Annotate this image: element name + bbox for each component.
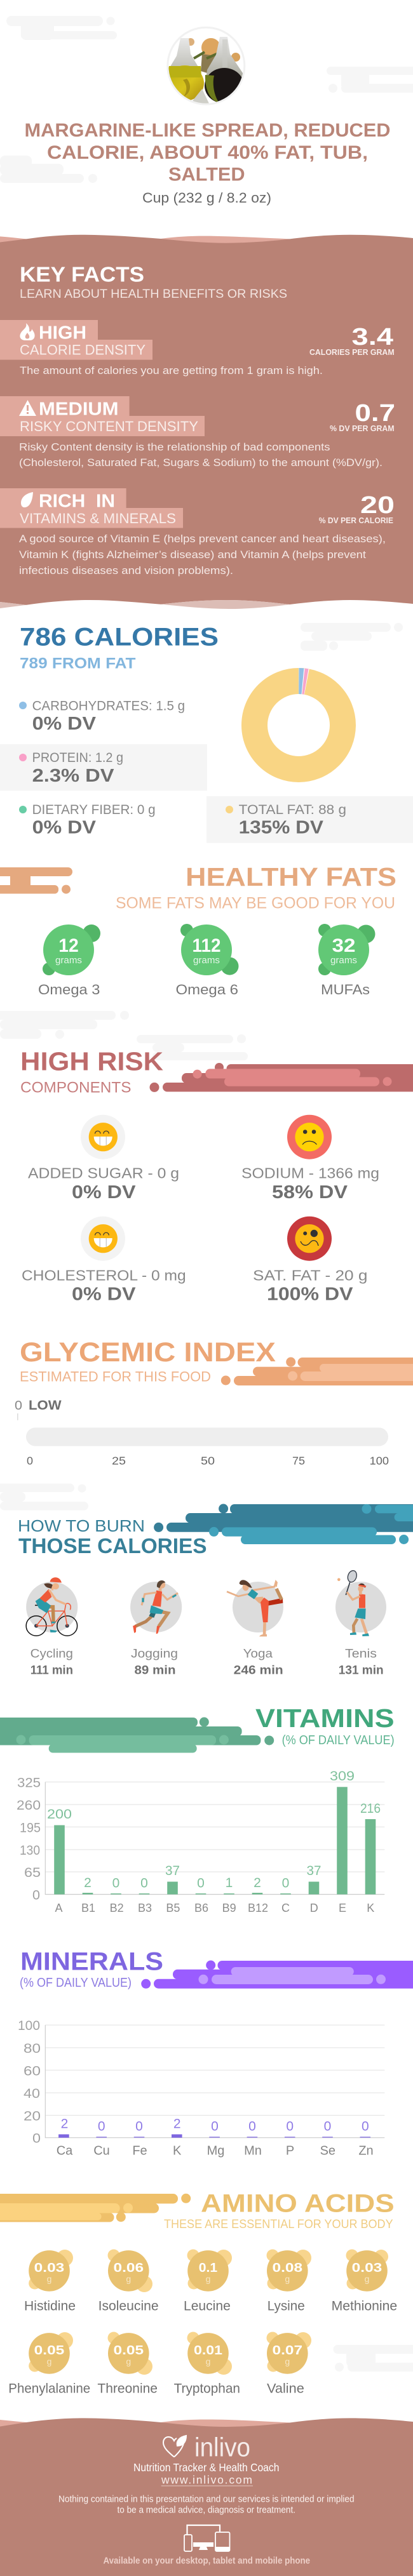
bar chart: minerals: 40 (24, 2086, 40, 2101)
bar chart: minerals: 2 (173, 2116, 181, 2131)
bar chart: minerals: 0 (324, 2119, 331, 2134)
bar chart: minerals: 0 (211, 2119, 219, 2134)
fact: calorie density: CALORIES PER GRAM (309, 347, 395, 357)
disclaimer: to be a medical advice, diagnosis or treatment. (117, 2504, 295, 2516)
bar chart: minerals: K (173, 2144, 182, 2158)
bar chart: minerals: 0 (98, 2119, 105, 2134)
fat: omega 6: 112 (192, 935, 221, 956)
bar chart: vitamins: B1 (81, 1902, 95, 1914)
macro: total fat: 135% DV (239, 818, 324, 838)
fat: omega 3: grams (55, 955, 82, 966)
amino: histidine: g (47, 2274, 51, 2284)
activity: jogging: 89 min (135, 1664, 175, 1678)
activity: yoga: Yoga (243, 1647, 273, 1661)
icon: queasy face (295, 1224, 324, 1253)
fact: rich in vitamins and minerals: 20 (360, 492, 395, 519)
bar chart: vitamins: 200 (47, 1807, 72, 1822)
background cloud: burn (0, 1483, 88, 1510)
fat: omega 6: grams (193, 955, 220, 966)
subheading: glycemic index: ESTIMATED FOR THIS FOOD (20, 1369, 211, 1384)
donut chart: macronutrients (254, 668, 343, 770)
risk: sodium: SODIUM - 1366 mg (241, 1165, 379, 1181)
bar chart: vitamins: 309 (330, 1769, 355, 1784)
tagline: Nutrition Tracker & Health Coach (133, 2461, 280, 2474)
subheading: healthy fats: SOME FATS MAY BE GOOD FOR YOU (116, 894, 395, 912)
background cloud: amino acids (333, 2345, 413, 2372)
amino: phenylalanine: Phenylalanine (8, 2382, 90, 2396)
logo: inlivo: inlivo (194, 2432, 250, 2462)
amino: valine: 0.07 (272, 2344, 302, 2358)
amino: histidine (24, 2250, 76, 2314)
risk: saturated fat: 100% DV (267, 1285, 353, 1305)
heading: healthy fats: HEALTHY FATS (186, 862, 396, 891)
glycemic index gauge: 100 (370, 1454, 389, 1467)
bar chart: vitamins: C (281, 1902, 290, 1914)
background clouds: high risk (0, 1011, 248, 1060)
fact: risky content density: 0.7 (355, 400, 395, 427)
heading: vitamins: VITAMINS (255, 1704, 395, 1733)
amino: isoleucine: 0.06 (113, 2261, 144, 2275)
amino: lysine (267, 2249, 311, 2314)
bar chart: minerals: Ca (57, 2144, 73, 2158)
risk: cholesterol: 0% DV (72, 1285, 136, 1305)
graphic: vitamins brush (0, 1717, 274, 1752)
bar chart: minerals: 60 (24, 2064, 41, 2078)
subheading: key facts: LEARN ABOUT HEALTH BENEFITS OR RISKS (20, 287, 287, 301)
activity: yoga: 246 min (234, 1664, 283, 1678)
title: SALTED (168, 164, 245, 185)
glycemic index gauge: 50 (201, 1454, 215, 1467)
activity: tennis (335, 1570, 386, 1678)
amino: phenylalanine: 0.05 (34, 2344, 64, 2358)
bar chart: vitamins: 0 (197, 1876, 205, 1891)
icon: heart and leaf (163, 2436, 186, 2457)
amino: lysine: 0.08 (272, 2261, 302, 2275)
bar chart: minerals: Mg (207, 2144, 224, 2158)
activity: tennis: Tenis (345, 1647, 377, 1661)
icon: flame (20, 323, 35, 340)
amino: phenylalanine (8, 2332, 90, 2396)
bar chart: minerals: Cu (93, 2144, 110, 2158)
bar chart: vitamins: 2 (84, 1876, 91, 1890)
amino: leucine: g (206, 2274, 210, 2284)
bar chart: vitamins: 37 (165, 1864, 180, 1878)
food photo: oil bottles (166, 27, 245, 105)
bar chart: vitamins: E (339, 1902, 346, 1914)
risk: cholesterol (22, 1217, 186, 1305)
heading: high risk: HIGH RISK (20, 1046, 163, 1076)
bar chart: vitamins: 0 (282, 1876, 289, 1891)
fat: MUFAs: grams (330, 955, 357, 966)
activity: jogging: Jogging (131, 1647, 178, 1661)
amino: tryptophan (174, 2332, 240, 2396)
macro: dietary fiber: DIETARY FIBER: 0 g (32, 803, 156, 817)
fact: calorie density (0, 320, 395, 377)
fact: rich in vitamins and minerals: A good source of Vitamin E (helps prevent cancer and heart diseases), (19, 533, 386, 545)
bar chart: vitamins: B5 (166, 1902, 180, 1914)
glycemic index gauge: 25 (112, 1454, 126, 1467)
bar chart: vitamins: 0 (112, 1876, 119, 1891)
fat: MUFAs: MUFAs (321, 982, 370, 998)
bar chart: vitamins: 325 (17, 1775, 41, 1790)
risk: cholesterol: CHOLESTEROL - 0 mg (22, 1267, 186, 1283)
fact: rich in vitamins and minerals: infectious diseases and vision problems). (19, 565, 233, 577)
bar chart: minerals: 0 (248, 2119, 256, 2134)
bar chart: minerals: Zn (358, 2144, 374, 2158)
bar chart: vitamins: 130 (20, 1843, 40, 1858)
activity: cycling: Cycling (30, 1647, 73, 1661)
icon: sad face (295, 1123, 324, 1151)
disclaimer (58, 2494, 355, 2516)
fact: calorie density: 3.4 (352, 324, 393, 350)
fat: omega 3: Omega 3 (38, 982, 100, 998)
amino: phenylalanine: g (47, 2356, 51, 2366)
fact: rich in vitamins and minerals: Vitamin K (fights Alzheimer’s disease) and Vitamin A (helps prevent (19, 549, 366, 561)
bar chart: minerals: 80 (24, 2041, 41, 2056)
subheading: vitamins: (% OF DAILY VALUE) (282, 1733, 395, 1747)
risk: sodium (241, 1115, 379, 1203)
activity: tennis: 131 min (339, 1664, 384, 1678)
fact: risky content density: MEDIUM (39, 399, 119, 420)
macro: dietary fiber: 0% DV (32, 818, 97, 838)
graphic: amino acids brush (0, 2194, 191, 2222)
glycemic index gauge: LOW (29, 1398, 62, 1413)
heading: glycemic index: GLYCEMIC INDEX (20, 1337, 276, 1368)
icon: leaf (21, 492, 33, 507)
heading: key facts: KEY FACTS (20, 264, 144, 287)
risk: added sugar: ADDED SUGAR - 0 g (28, 1165, 179, 1181)
fact: risky content density: Risky Content density is the relationship of bad components (19, 441, 330, 453)
fact: rich in vitamins and minerals: RICH IN (39, 491, 115, 512)
amino: methionine: g (365, 2274, 369, 2284)
macro: carbohydrates: 0% DV (32, 714, 97, 734)
macro: protein (0, 744, 207, 791)
fat: omega 3: 12 (58, 935, 79, 956)
bar chart: vitamins: 0 (32, 1888, 40, 1902)
background cloud: calories (301, 623, 403, 651)
bar chart: vitamins: D (310, 1902, 318, 1914)
activity: yoga (227, 1580, 283, 1678)
title (24, 120, 390, 185)
bar chart: vitamins: B6 (194, 1902, 208, 1914)
fact: risky content density: RISKY CONTENT DENSITY (20, 418, 198, 434)
heading: how to burn: HOW TO BURN (18, 1516, 145, 1535)
disclaimer: Nothing contained in this presentation and our services is intended or implied (58, 2494, 355, 2504)
risk: added sugar (28, 1115, 179, 1203)
fact: risky content density: (Cholesterol, Saturated Fat, Sugars & Sodium) to the amount (%DV/gr). (19, 457, 383, 469)
bar chart: minerals (18, 2019, 384, 2158)
background clouds: header (0, 16, 413, 183)
icon: warning triangle (19, 400, 36, 416)
bar chart: vitamins: 1 (226, 1876, 233, 1890)
bar chart: vitamins: B3 (138, 1902, 152, 1914)
amino: leucine: 0.1 (199, 2261, 217, 2275)
subheading: amino acids: THESE ARE ESSENTIAL FOR YOUR BODY (164, 2218, 393, 2231)
fact: risky content density: % DV PER GRAM (330, 424, 395, 433)
bar chart: vitamins: 2 (254, 1876, 261, 1890)
amino: threonine: g (126, 2356, 131, 2366)
fact: calorie density: HIGH (39, 323, 86, 344)
serving size: Cup (232 g / 8.2 oz) (142, 190, 271, 206)
icon: runner (130, 1580, 182, 1634)
fat: omega 3 (38, 924, 100, 998)
amino: histidine: 0.03 (34, 2261, 64, 2275)
title: CALORIE, ABOUT 40% FAT, TUB, (47, 142, 368, 163)
amino: histidine: Histidine (24, 2299, 76, 2314)
bar chart: vitamins: 37 (306, 1864, 322, 1878)
bar chart: minerals: P (286, 2144, 294, 2158)
macro: protein: PROTEIN: 1.2 g (32, 751, 123, 765)
bar chart: minerals: Mn (244, 2144, 262, 2158)
graphic: healthy fats brush (0, 867, 72, 894)
bar chart: minerals: 0 (286, 2119, 294, 2134)
bar chart: vitamins: 0 (140, 1876, 148, 1891)
glycemic index gauge (15, 1398, 389, 1467)
bar chart: vitamins: B2 (110, 1902, 124, 1914)
graphic: burn brush (154, 1504, 413, 1544)
amino: threonine: 0.05 (113, 2344, 144, 2358)
panel: key facts (0, 235, 413, 609)
bar chart: vitamins: K (367, 1902, 374, 1914)
glycemic index gauge: 75 (292, 1454, 305, 1467)
amino: tryptophan: Tryptophan (174, 2382, 240, 2396)
macro: total fat: TOTAL FAT: 88 g (239, 803, 346, 817)
heading: calories: 786 CALORIES (20, 623, 219, 651)
graphic: minerals brush (141, 1961, 413, 1989)
bar chart: minerals: 0 (362, 2119, 369, 2134)
availability note: Available on your desktop, tablet and mobile phone (103, 2555, 310, 2566)
subheading: calories from fat: 789 FROM FAT (20, 655, 136, 672)
fat: omega 6 (175, 924, 239, 998)
activity: cycling (26, 1577, 78, 1678)
fact: risky content density (0, 396, 395, 469)
macro: carbohydrates: CARBOHYDRATES: 1.5 g (32, 698, 185, 713)
risk: saturated fat: SAT. FAT - 20 g (253, 1267, 367, 1283)
fact: rich in vitamins and minerals (0, 488, 395, 577)
fat: MUFAs: 32 (332, 935, 356, 956)
icon: cyclist (26, 1577, 78, 1636)
activity: jogging (130, 1580, 182, 1678)
amino: leucine: Leucine (184, 2299, 231, 2314)
bar chart: minerals: 0 (32, 2132, 41, 2146)
bar chart: minerals: 20 (24, 2109, 41, 2123)
amino: tryptophan: 0.01 (194, 2344, 222, 2358)
icon: tennis player (335, 1570, 386, 1636)
amino: methionine: 0.03 (352, 2261, 382, 2275)
amino: valine (267, 2332, 311, 2396)
bar chart: vitamins: B12 (248, 1902, 268, 1914)
risk: added sugar: 0% DV (72, 1182, 136, 1203)
amino: valine: g (285, 2356, 290, 2366)
bar chart: vitamins: 216 (360, 1801, 381, 1816)
fat: MUFAs (318, 924, 375, 998)
bar chart: vitamins: A (55, 1902, 63, 1914)
bar chart: vitamins: 195 (20, 1820, 41, 1835)
bar chart: minerals: Fe (132, 2144, 147, 2158)
bar chart: minerals: Se (320, 2144, 335, 2158)
website link: www.inlivo.com (161, 2473, 252, 2486)
bar chart: minerals: 2 (61, 2116, 68, 2131)
glycemic index gauge: 0 (27, 1454, 33, 1467)
amino: tryptophan: g (206, 2356, 210, 2366)
fact: calorie density: CALORIE DENSITY (20, 342, 146, 358)
risk: saturated fat (253, 1217, 367, 1305)
subheading: minerals: (% OF DAILY VALUE) (20, 1976, 132, 1990)
panel: footer (0, 2418, 413, 2576)
fact: rich in vitamins and minerals: % DV PER CALORIE (319, 516, 393, 525)
macro: dietary fiber (19, 803, 156, 838)
amino: isoleucine (98, 2249, 159, 2314)
bar chart: vitamins: 65 (24, 1865, 41, 1880)
graphic: glycemic brush (221, 1358, 413, 1385)
title: MARGARINE-LIKE SPREAD, REDUCED (24, 120, 390, 141)
heading: those calories: THOSE CALORIES (18, 1534, 207, 1558)
subheading: components: COMPONENTS (20, 1079, 131, 1097)
amino: valine: Valine (267, 2382, 304, 2396)
fat: omega 6: Omega 6 (175, 982, 238, 998)
icon: grin face (89, 1123, 118, 1151)
amino: lysine: Lysine (267, 2299, 305, 2314)
heading: minerals: MINERALS (20, 1948, 163, 1976)
bar chart: vitamins: B9 (222, 1902, 236, 1914)
amino: isoleucine: g (126, 2274, 131, 2284)
bar chart: minerals: 0 (135, 2119, 143, 2134)
bar chart: vitamins: 260 (17, 1798, 41, 1813)
amino: threonine (97, 2332, 158, 2396)
bar chart: vitamins (17, 1769, 384, 1914)
macro: protein: 2.3% DV (32, 766, 114, 786)
icon: devices (184, 2525, 230, 2551)
macro: total fat (207, 796, 413, 843)
glycemic index gauge: 0 (15, 1399, 22, 1413)
heading: amino acids: AMINO ACIDS (201, 2189, 395, 2217)
activity: cycling: 111 min (30, 1664, 73, 1678)
icon: yoga figure (227, 1580, 283, 1636)
amino: threonine: Threonine (97, 2382, 158, 2396)
amino: methionine (332, 2249, 397, 2314)
macro: carbohydrates (19, 698, 185, 734)
amino: leucine (184, 2249, 232, 2314)
logo: inlivo (163, 2432, 250, 2462)
amino: lysine: g (285, 2274, 290, 2284)
amino: isoleucine: Isoleucine (98, 2299, 159, 2314)
bar chart: minerals: 100 (18, 2019, 40, 2033)
fact: calorie density: The amount of calories you are getting from 1 gram is high. (20, 365, 323, 377)
fact: rich in vitamins and minerals: VITAMINS & MINERALS (20, 511, 176, 526)
amino: methionine: Methionine (332, 2299, 397, 2314)
icon: grin face (89, 1224, 118, 1253)
risk: sodium: 58% DV (272, 1182, 348, 1203)
graphic: high risk brush (150, 1063, 413, 1092)
